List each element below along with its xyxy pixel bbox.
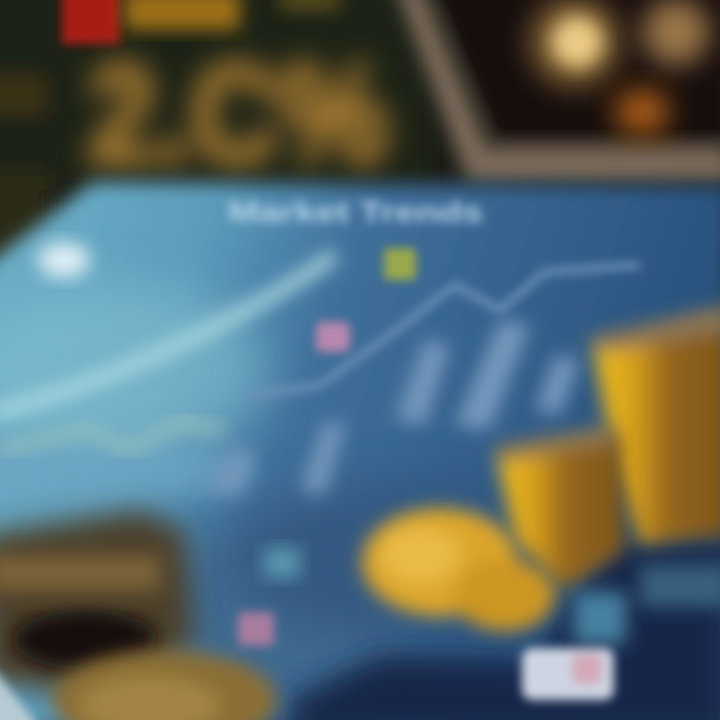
heading: chart title: Market Trends	[228, 196, 483, 229]
heading: blurred gold percentage: 2.C%	[88, 35, 388, 194]
panel: dark poster at top left	[0, 0, 430, 260]
panel: blue chart screen	[0, 182, 720, 720]
chart: pale zigzag line at left	[0, 422, 225, 450]
icon: small teal marker	[264, 548, 300, 578]
icon: pile of loose gold coins	[362, 508, 555, 631]
icon: tall stack of gold coins	[592, 304, 720, 545]
icon: small pink marker	[238, 612, 274, 646]
icon: pink marker	[316, 322, 350, 352]
icon: gold coin at bottom	[53, 650, 277, 720]
icon: yellow-green square marker	[384, 248, 416, 280]
panel: lighter glow at left of screen	[0, 285, 610, 700]
panel: dark base at bottom right	[290, 540, 720, 720]
callout: white and pink tag	[522, 648, 614, 700]
icon: medium stack of gold coins	[495, 426, 625, 590]
red label block	[62, 0, 120, 44]
icon: white cloud marker	[38, 242, 90, 278]
chart: bars on screen	[205, 320, 580, 495]
gold label bars	[124, 0, 340, 30]
icon: coin box highlights	[0, 555, 160, 670]
chart: line chart at right of screen	[250, 265, 640, 395]
panel: tablet frame at top right	[395, 0, 720, 182]
panel: blue tiles at lower right	[574, 565, 720, 644]
icon: dark coin box at bottom left	[0, 510, 195, 700]
icon: glowing lights	[529, 0, 710, 136]
icon: pale corner highlight	[0, 665, 42, 720]
chart: bright diagonal trend band	[0, 255, 335, 414]
